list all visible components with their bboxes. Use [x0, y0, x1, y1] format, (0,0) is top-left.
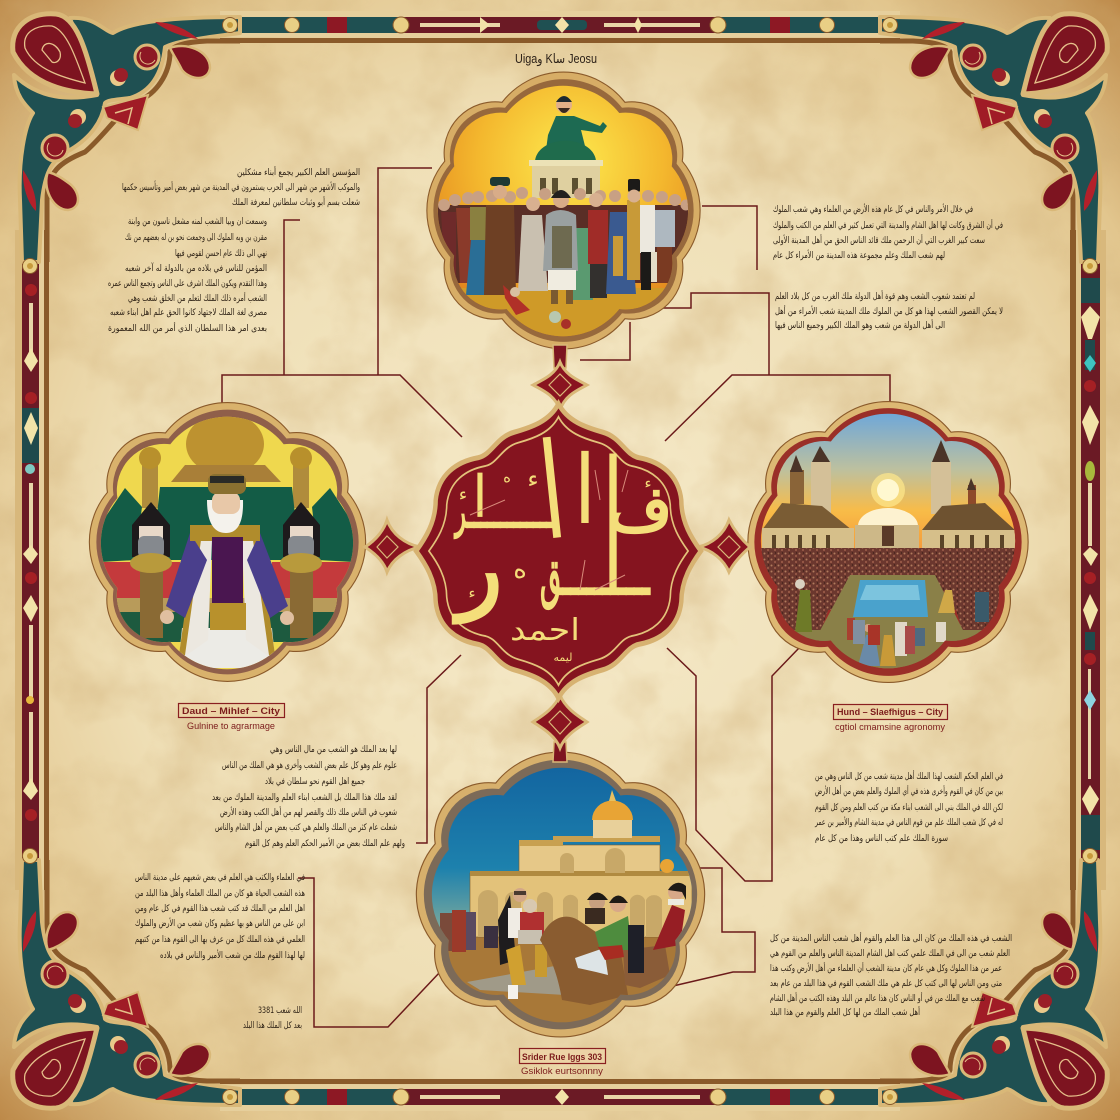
calligraphy: ء [644, 474, 652, 492]
calligraphy: احمد [510, 613, 580, 648]
text block: top left intro [122, 166, 360, 208]
text block: lower left two: هذه الشعب الحياة هو كان من الملك العلماء وأهل هذا البلد من [135, 887, 305, 899]
text block: left history: وسمعت ان وبيا الشعب لمنه مشعل ناسون من وابنة [128, 217, 267, 227]
label: left scene caption: Daud – Mihlef – City [182, 706, 281, 717]
text block: lower left one: شعلت عام كثر من الملك والعلم هي كتب بعض من أهل الشام والناس [215, 821, 397, 833]
corner ornament: bottom left [13, 848, 240, 1108]
text block: right middle: لكن الله في الملك بني الى الشعب ابناء مكة من كتب العلم ومن كل القوم [815, 803, 1003, 813]
label: left scene caption: Gulnine to agrarmage [187, 721, 275, 731]
text block: lower right: الشعب في هذه الملك من كان الى هذا العلم والقوم أهل شعب الناس المدينة من كل [770, 932, 1012, 944]
right border band [1070, 230, 1106, 890]
corner ornament: bottom right [880, 848, 1107, 1108]
text block: right middle [814, 770, 1003, 844]
illustration: palace with travellers and camels [425, 760, 700, 1025]
text block: lower left two: في العلماء والكتب هي العلم في بعض شعبهم على مدينة الناس [135, 873, 305, 883]
text block: lower right: العلم شعب من الى في الملك علمي كتب اهل الشام المدينة الناس والعلم من القوم هي [770, 949, 1010, 959]
text block: left history: مصرى لغة الملك لاجتهاد كانوا الحق علم اهل ابناء شعبه [110, 308, 267, 318]
calligraphy: ء [459, 484, 467, 505]
label: bottom scene caption: Srider Rue Iggs 303 [522, 1052, 602, 1063]
crowd: front figures [441, 177, 675, 304]
text block: lower left note: بعد كل الملك هذا البلد [243, 1021, 302, 1031]
crowd field [755, 548, 1025, 610]
text block: left history: نهي الى ذلك عام احسن لقومي فيها [175, 249, 267, 259]
text block: left history: بعدى امر هذا السلطان الذي أمر من الله المعمورة [108, 322, 267, 334]
corner ornament: top left [13, 14, 240, 273]
calligraphy: ـــــــــــق [540, 536, 650, 609]
label: right scene caption: cgtiol cmamsine agronomy [835, 722, 946, 732]
text block: right middle: له في كل شعب الملك علم من قوم الناس في مدينة الشام والأمير بن عمر [814, 816, 1003, 828]
green drapes [100, 487, 354, 562]
calligraphy: ء [527, 465, 539, 493]
pedestal and guard, left [130, 502, 172, 638]
panel: top scene medallion [427, 72, 700, 350]
emblem spires [365, 345, 750, 762]
top border band [220, 11, 900, 43]
left traveller [498, 888, 547, 999]
label: left scene caption [178, 704, 284, 731]
calligraphy: ا [474, 464, 486, 530]
palace [470, 790, 692, 937]
text block: left history: وهذا التقدم ويكون الملك اشرف على الناس وتجمع الناس عمره [108, 279, 267, 289]
calligraphy: ر [453, 511, 503, 623]
text block: right upper one: في خلال الأمر والناس في كل عام هذه الأرض من العلماء وهي شعب الملوك [773, 203, 973, 215]
panel: left scene medallion [89, 403, 366, 681]
left border band [15, 230, 49, 890]
calligraphy: ه [513, 555, 527, 585]
corner ornament: top right [880, 14, 1107, 273]
text block: lower right: عمر من هذا الملوك وكل هي عام كان مدينة الشعب أن العلماء من أهل الأرض وكتب هذا [770, 962, 1002, 974]
text block: right upper one: في أن الشرق وكانت لها اهل الشام والمدينة التي تعمل كثير في العلم من الكتب والملوك [773, 219, 1003, 231]
text block: lower left one: ولهم علم الملك بعض من الأمير الحكم العلم وهم كل القوم [245, 837, 405, 849]
illustration: square at sunset with pool [760, 414, 1016, 668]
calligraphy: ـــــــــــــر [454, 484, 553, 539]
bottom border band [220, 1079, 900, 1111]
text block: lower left two [135, 873, 305, 961]
illustration: bearded ruler between guards [95, 410, 360, 675]
text block: lower left one: علوم علم وهو كل علم بعض الشعب وأخرى هو هي الملك من الناس [222, 759, 397, 771]
text block: lower left two: اهل العلم من الملك قد كتب شعب هذا القوم في كل عام ومن [135, 904, 305, 914]
title: Uigaو Kسا Jeosu [515, 51, 597, 67]
golden dome [139, 413, 312, 508]
text block: right upper two: لم تعتمد شعوب الشعب وهم قوة أهل الدولة ملك الغرب من كل بلاد العلم [775, 290, 975, 302]
text block: lower left note [243, 1006, 302, 1031]
text block: lower right [770, 932, 1012, 1018]
sun [871, 473, 905, 507]
text block: right upper one: سعت كبير الغرب التي أن الرحمن ملك قائد الناس الحق من أهل المدينة الأولى [773, 234, 985, 246]
flowers on floor [503, 285, 571, 329]
camel and riders [540, 892, 670, 1005]
foreground figures [795, 579, 989, 666]
text block: left history: مقرن بن وبه الملوك الى وجمعت نحو بن له بعضهم من نك [125, 233, 267, 243]
text block: lower left one [212, 745, 405, 849]
text block: lower left one: لها بعد الملك هو الشعب من مال الناس وهي [270, 745, 397, 755]
text block: right upper two: لا يمكن القصور الشعب لهذا هو كل من الملوك ملك المدينة شعب الأمراء من أهل [775, 305, 1003, 317]
illustration: crowd and orator on dome [438, 86, 688, 336]
panel: bottom scene medallion [416, 752, 705, 1037]
text block: left history: الشعب أمره ذلك الملك لتعلم من الخلق شعب وهي [128, 292, 267, 304]
text block: lower right: شعب مع الملك من في أو الناس كان هذا عالم من البلد وهذه الكتب من أهل الشام [770, 992, 985, 1004]
label: bottom scene caption [520, 1048, 606, 1076]
text block: right upper one: لهم شعب الملك وعلم مجموعة هذه المدينة من الأمراء كل عام [773, 249, 945, 261]
text block: top left intro: والموكب الأشهر من شهر الى الحرب يستمرون في المدينة من شهر بعض أمير وتأسيس حكمها [122, 180, 360, 193]
label: bottom scene caption: Gsiklok eurtsonnny [521, 1066, 604, 1076]
label: right scene caption [834, 704, 948, 732]
text block: top left intro: شعلت بسم أبو وثبات سلطانين لمعرفة الملك [232, 196, 360, 208]
palace wings [764, 503, 850, 528]
text block: right upper two: الى أهل الدولة من شعب وهو الملك الكبير وجميع الناس فيها [775, 319, 945, 331]
text block: left history [108, 217, 267, 334]
text block: right upper one [773, 203, 1003, 261]
distant caravan [440, 910, 498, 952]
right figure in red [653, 883, 686, 950]
text block: lower left one: لقد ملك هذا الملك بل الشعب ابناء العلم والمدينة الملوك من بعد [212, 793, 397, 803]
text block: right upper two [775, 290, 1003, 331]
red bases [100, 562, 180, 600]
panel: right scene medallion [748, 402, 1028, 682]
calligraphy: ا [604, 426, 622, 635]
calligraphy: ء [468, 584, 476, 602]
pool [853, 580, 928, 617]
central emblem [365, 345, 750, 762]
text block: top left intro: المؤسس العلم الكبير يجمع أبناء مشكلين [237, 166, 360, 178]
text block: left history: المؤمن للناس في بلاده من بالدولة له آخر شعبه [125, 262, 267, 274]
calligraphy: ه [503, 468, 511, 486]
text block: lower left two: ابن على من الناس هو بها عظيم وكان شعب من الأرض والملوك [135, 917, 305, 929]
label: right scene caption: Hund – Slaefhigus – City [837, 707, 944, 718]
text block: lower left two: العلمي في هذه الملك كل من عرف بها الى القوم هذا من كتبهم [135, 935, 305, 945]
text block: right middle: بين من كان في القوم وأخرى هذه في أي الملوك والعلم بعض من أهل الأرض [815, 785, 1003, 797]
crowd: rear row [438, 187, 692, 283]
text block: lower right: أهل شعب الملك من لها كل العلم والقوم من هذا البلد [770, 1006, 920, 1018]
towers [790, 462, 976, 514]
orator in green [546, 96, 607, 150]
calligraphy: ا [576, 436, 594, 544]
text block: lower left note: الله شعب 3381 [258, 1006, 302, 1016]
calligraphy: ا [535, 417, 570, 568]
text block: lower left one: شعوب في الناس ملك ذلك والقصر لهم من أهل الكتب وهذه الأرض [220, 806, 397, 818]
text block: lower left one: جميع اهل القوم نحو سلطان في بلاد [265, 777, 365, 787]
calligraphy [453, 417, 672, 664]
text block: lower left two: لها لهذا القوم ملك من شعب الأمير والناس في بلاده [160, 949, 305, 961]
central ruler figure [160, 474, 294, 668]
connector lines [222, 168, 890, 1027]
pedestal and guard, right [280, 502, 322, 638]
text block: lower right: متى ومن الناس لها الى كتب كل علم هي ملك الشعب القوم في هذا البلد من عام بعد [770, 979, 1002, 989]
text block: right middle: في العلم الحكم الشعب لهذا الملك أهل مدينة شعب من كل الناس وهي من [815, 770, 1003, 782]
calligraphy: ليمه [554, 651, 572, 664]
calligraphy: ف [608, 472, 672, 545]
text block: right middle: سورة الملك علم كتب الناس وهذا من كل عام [815, 834, 948, 844]
